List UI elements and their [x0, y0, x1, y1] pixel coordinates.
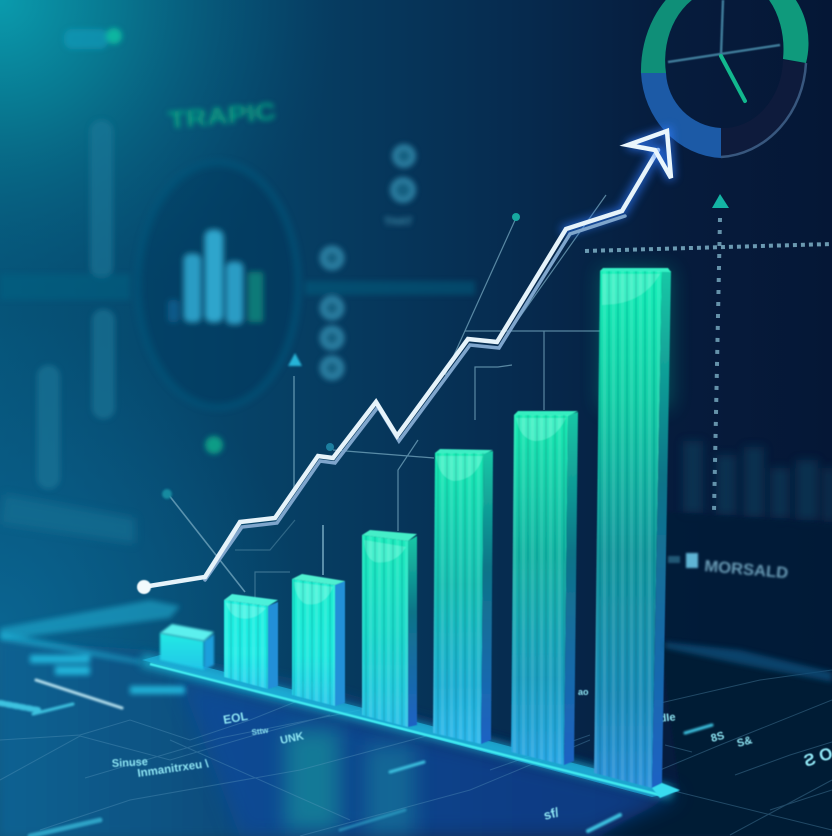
line — [143, 150, 658, 587]
label: morsald: MORSALD — [704, 558, 789, 582]
label: morsald — [668, 553, 789, 582]
bar 1 — [160, 624, 214, 670]
arrow head — [628, 131, 671, 178]
bar baseline glow — [142, 655, 680, 797]
ring column far left — [37, 120, 115, 489]
floor plane — [0, 640, 832, 836]
blue segment — [641, 73, 721, 158]
top left label — [64, 28, 122, 49]
triangle marker — [712, 194, 729, 208]
dotted vertical — [714, 218, 720, 512]
floor text: S& — [736, 734, 754, 750]
bar 5 — [433, 449, 493, 744]
bar chart — [160, 268, 680, 798]
growth line — [137, 131, 671, 594]
line shadow — [205, 216, 625, 580]
bar 6 — [511, 411, 578, 765]
cyan dashes — [0, 703, 712, 836]
floor text: sf/ — [542, 804, 561, 823]
arrow head glow — [628, 131, 671, 179]
floor labels — [0, 600, 832, 836]
blurred far bars, right — [683, 441, 832, 522]
bar 3 — [292, 574, 345, 706]
green dot — [205, 436, 223, 454]
gauge hand — [721, 56, 745, 101]
dark segment — [721, 60, 806, 158]
mini bar chart — [168, 230, 263, 324]
dial ring behind mini chart — [138, 163, 298, 407]
thin connector lines — [168, 195, 606, 600]
ring icons middle column — [323, 249, 341, 377]
floor text: EOL — [222, 709, 249, 727]
floor text: dIe — [659, 711, 676, 725]
floor text: UNK — [279, 730, 305, 747]
green segment right — [766, 0, 809, 63]
white dash — [36, 680, 122, 708]
blurred background dashboard, left — [0, 28, 475, 489]
dotted horizontal — [585, 244, 832, 251]
bar 7 — [594, 268, 680, 798]
horizontal blur bands — [0, 274, 475, 300]
bar 4 — [362, 530, 417, 727]
crosshair dotted lines — [585, 194, 832, 512]
blurred panel bar — [0, 494, 135, 544]
floor text: 8S — [710, 730, 726, 745]
line glow — [566, 150, 658, 230]
floor text: Inmanitrxeu \ — [137, 758, 210, 780]
start dot — [137, 580, 151, 594]
right dark panel — [666, 512, 832, 680]
heading: traffic: TRAPIC — [167, 98, 277, 134]
floor grid — [0, 670, 832, 836]
small label: THAT — [384, 216, 413, 228]
green segment left — [641, 0, 712, 73]
gauge — [641, 0, 809, 158]
floor text: ao — [578, 687, 589, 697]
connector end dots — [162, 213, 520, 499]
bar 2 — [224, 594, 278, 689]
floor text — [112, 687, 832, 823]
blurred glow labels — [0, 600, 185, 694]
ring icons top — [393, 147, 413, 200]
floor text: Sinuse — [112, 756, 148, 770]
floor band right — [665, 642, 832, 682]
gauge spokes — [668, 0, 780, 62]
floor text: Sttw — [251, 726, 270, 737]
